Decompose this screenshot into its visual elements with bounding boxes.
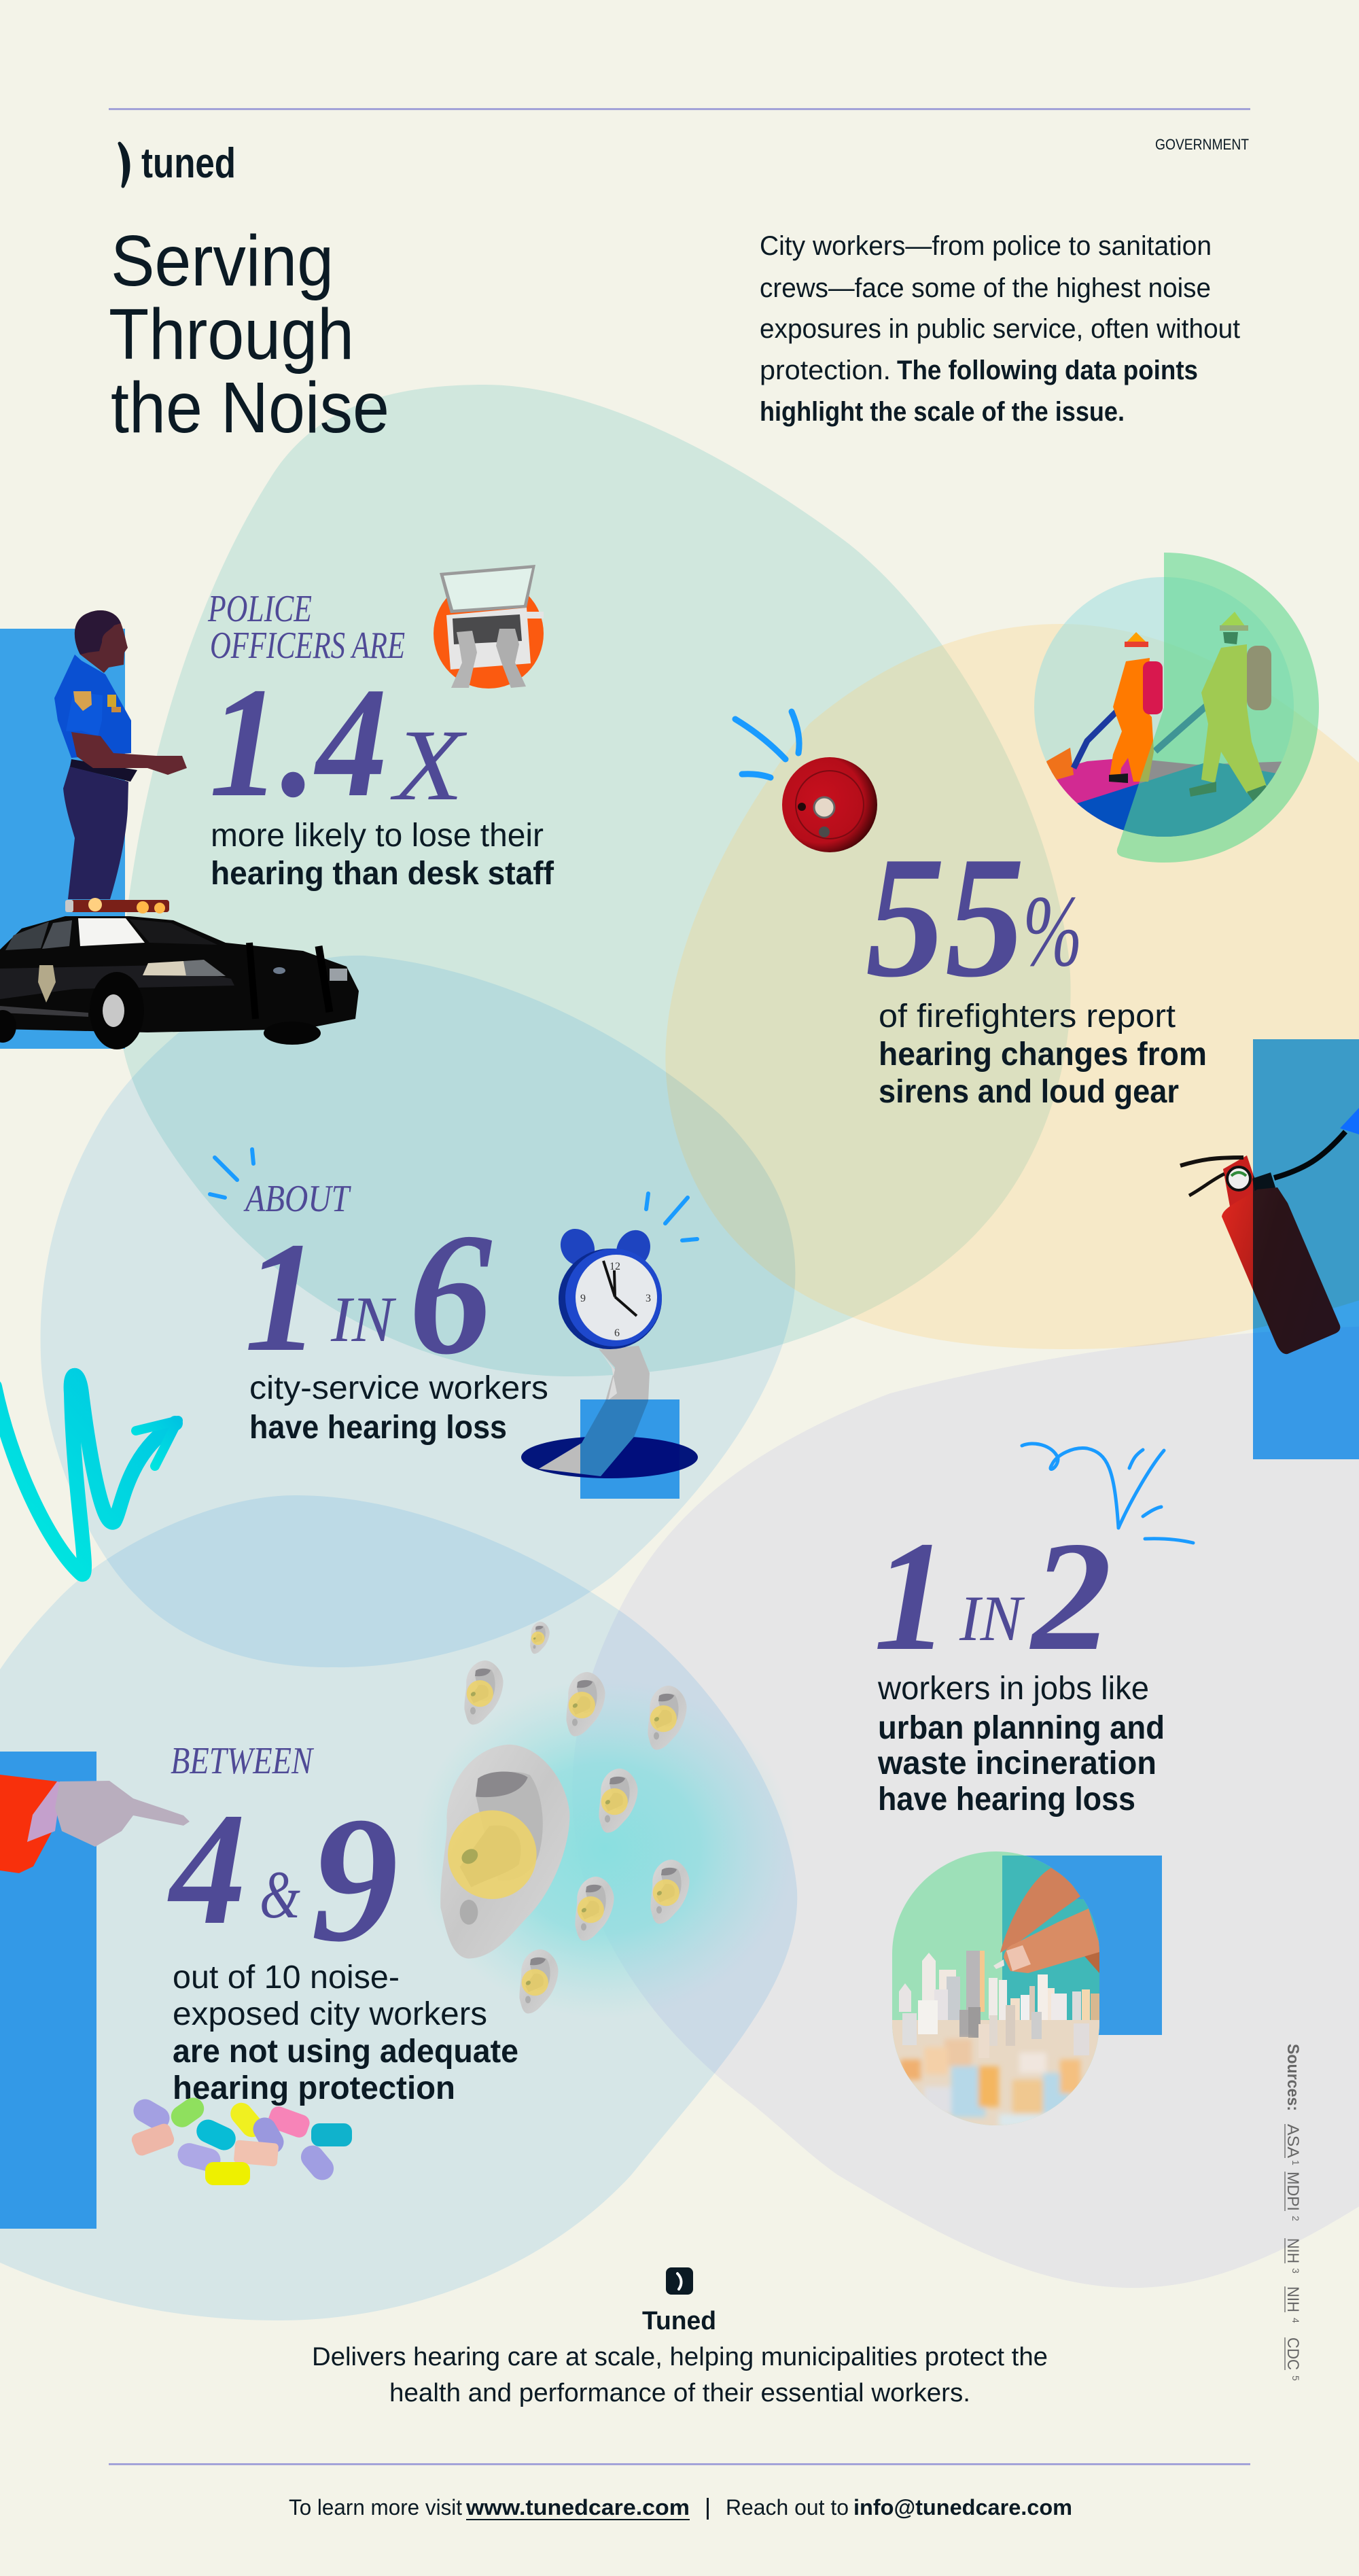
text: firefighters description: sirens and loud gear xyxy=(879,1074,1179,1110)
blob: grey 1 in 2 xyxy=(572,1325,1359,2288)
arrow: teal zigzag xyxy=(0,1376,178,1574)
heading: police officers are xyxy=(207,588,405,667)
stat: 4 and 9 xyxy=(167,1780,398,1979)
text: 4 and 9 description xyxy=(173,1960,518,2106)
title: the Noise xyxy=(111,368,389,448)
brand description: health and performance of their essential workers. xyxy=(389,2379,970,2407)
icon: pointing hand xyxy=(0,1775,190,1873)
category label: GOVERNMENT xyxy=(1155,136,1249,153)
text: 4 and 9 description: are not using adequate xyxy=(173,2034,518,2070)
panel: 1 in 6 xyxy=(210,1149,698,1499)
icon: miniature city and fingers xyxy=(890,1849,1102,2129)
footer contact line: To learn more visit xyxy=(289,2495,462,2520)
blue block behind city xyxy=(1002,1856,1162,2035)
text: 1 in 2 description: urban planning and xyxy=(878,1710,1165,1746)
panel: police officers xyxy=(0,565,554,1049)
text: 1 in 2 description: waste incineration xyxy=(877,1745,1157,1781)
stat: 1 in 2: 2 xyxy=(1029,1509,1112,1683)
title: Serving xyxy=(111,221,334,301)
stat: 1 in 2: 1 xyxy=(874,1509,949,1684)
icon: hand holding clock: 12 xyxy=(610,1261,620,1272)
text: 4 and 9 description: hearing protection xyxy=(173,2070,455,2106)
icon: earplugs xyxy=(129,2093,352,2185)
sources: ASA xyxy=(1284,2124,1302,2158)
heading: police officers are: POLICE xyxy=(207,588,312,630)
blob: green police xyxy=(120,385,1071,1376)
blue block left xyxy=(0,1752,96,2229)
icon: hand holding clock xyxy=(539,1223,662,1476)
icon: sound lines clock xyxy=(646,1194,697,1240)
blue block over hand xyxy=(580,1399,680,1499)
text: 1 in 6 description: city-service workers xyxy=(249,1370,548,1406)
panel: 4 and 9 xyxy=(0,1622,795,2229)
sources: 1 xyxy=(1290,2160,1301,2165)
sources xyxy=(1284,2044,1302,2381)
text: 1 in 6 description xyxy=(249,1370,548,1446)
stat: 1 in 2 xyxy=(874,1509,1112,1684)
stat: 4 and 9: 4 xyxy=(167,1780,246,1958)
header rule xyxy=(109,108,1250,110)
text: 4 and 9 description: out of 10 noise- xyxy=(173,1960,400,1996)
blob: pale blue 4 and 9 xyxy=(0,1495,797,2320)
brand description: Delivers hearing care at scale, helping municipalities protect the xyxy=(312,2343,1048,2371)
brand block: Tuned xyxy=(312,2267,1048,2407)
icon: hand holding clock: 3 xyxy=(646,1293,651,1304)
stat: 1 in 6: 6 xyxy=(409,1197,492,1391)
blue block over extinguisher xyxy=(1253,1039,1359,1459)
icon: hand holding clock: 6 xyxy=(614,1327,620,1339)
intro paragraph: City workers—from police to sanitation xyxy=(760,231,1212,261)
brand description xyxy=(312,2343,1048,2407)
sources: 3 xyxy=(1290,2268,1301,2274)
footer contact line xyxy=(289,2495,1072,2520)
intro paragraph: exposures in public service, often without xyxy=(760,314,1240,344)
stat: 1.4x: X xyxy=(390,709,467,822)
footer contact line: www.tunedcare.com xyxy=(465,2495,690,2520)
intro paragraph: The following data points xyxy=(897,355,1198,385)
stat: 1 in 6: IN xyxy=(330,1283,396,1355)
text: 4 and 9 description: exposed city workers xyxy=(173,1996,487,2032)
icon: hole in ground xyxy=(521,1436,698,1478)
text: firefighters description xyxy=(879,998,1207,1110)
title: Through xyxy=(109,294,354,375)
sources: CDC xyxy=(1284,2337,1302,2370)
icon: police officer xyxy=(54,610,187,899)
stat: 1 in 6 xyxy=(245,1197,492,1391)
icon: hand holding clock: 9 xyxy=(580,1293,586,1304)
icon: blue doodle xyxy=(1022,1444,1193,1543)
intro paragraph: crews—face some of the highest noise xyxy=(760,273,1211,303)
blob: yellow firefighters xyxy=(665,624,1359,1349)
text: 1 in 2 description xyxy=(877,1671,1165,1817)
heading: between: BETWEEN xyxy=(171,1740,314,1782)
intro paragraph: highlight the scale of the issue. xyxy=(760,397,1125,427)
text: 1 in 2 description: workers in jobs like xyxy=(877,1671,1149,1707)
panel: 1 in 2 xyxy=(874,1444,1193,2129)
icon: laptop typing xyxy=(434,565,544,689)
text: police description: more likely to lose their xyxy=(211,818,544,854)
icon: sound lines left xyxy=(210,1149,253,1198)
sources: Sources: xyxy=(1284,2044,1302,2111)
intro paragraph xyxy=(760,231,1240,427)
footer contact line: info@tunedcare.com xyxy=(853,2495,1072,2520)
text: firefighters description: hearing changes from xyxy=(879,1037,1207,1073)
text: firefighters description: of firefighters report xyxy=(879,998,1176,1034)
blue block behind officer xyxy=(0,629,125,1049)
stat: 1 in 2: IN xyxy=(959,1582,1025,1654)
footer contact line: Reach out to xyxy=(726,2495,849,2520)
panel: firefighters xyxy=(735,553,1359,1459)
text: 1 in 6 description: have hearing loss xyxy=(249,1410,507,1446)
heading: police officers are: OFFICERS ARE xyxy=(210,625,405,667)
stat: 1.4x: 1.4 xyxy=(209,655,387,830)
title xyxy=(109,221,389,448)
stat: 1 in 6: 1 xyxy=(245,1210,319,1385)
stat: 55%: % xyxy=(1023,875,1082,988)
icon: ears xyxy=(440,1622,690,2013)
sources: NIH xyxy=(1284,2286,1302,2312)
teal glow behind ears xyxy=(414,1679,795,2019)
stat: 4 and 9: 9 xyxy=(311,1780,398,1979)
brand name: Tuned xyxy=(642,2307,716,2335)
text: 1 in 2 description: have hearing loss xyxy=(878,1781,1135,1817)
blob: pale blue 1 in 6 xyxy=(41,956,795,1667)
stat: 55%: 55 xyxy=(866,821,1025,1013)
footer rule xyxy=(109,2463,1250,2465)
logo xyxy=(120,140,236,187)
sources: NIH xyxy=(1284,2238,1302,2263)
heading: about: ABOUT xyxy=(243,1178,351,1220)
sources: MDPI xyxy=(1284,2172,1302,2211)
background blobs xyxy=(0,385,1359,2320)
stat: 4 and 9: & xyxy=(260,1857,300,1932)
text: police description: hearing than desk staff xyxy=(211,856,554,892)
icon: police car xyxy=(0,898,359,1049)
icon: alarm sound lines xyxy=(735,712,799,778)
icon: fire extinguisher xyxy=(1180,1108,1359,1354)
icon: firefighters circle xyxy=(1034,553,1319,863)
icon: tuned mark xyxy=(666,2267,693,2295)
sources: 5 xyxy=(1290,2375,1301,2381)
intro paragraph: protection. xyxy=(760,355,891,385)
logo: tuned xyxy=(141,140,236,187)
text: police description xyxy=(211,818,554,892)
sources: 2 xyxy=(1290,2216,1301,2221)
sources: 4 xyxy=(1290,2318,1301,2323)
icon: fire alarm bell xyxy=(782,757,877,852)
